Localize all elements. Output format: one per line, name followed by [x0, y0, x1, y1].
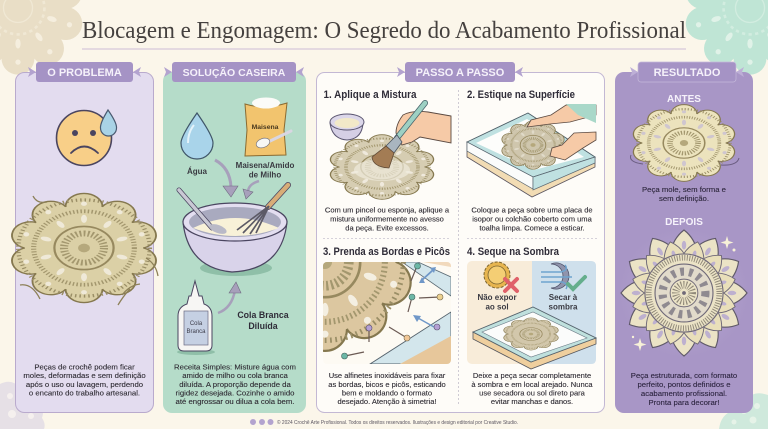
icon: cornstarch bag	[245, 98, 291, 156]
text: step 3: Use alfinetes inoxidáveis para fixar	[329, 371, 446, 380]
ribbon: solução caseira	[164, 62, 304, 82]
text: recipe: até engrossar ou dilua a cola bem.	[176, 397, 294, 406]
text: step 2: toalha limpa. Comece a esticar.	[479, 223, 585, 232]
text: step 2: Coloque a peça sobre uma placa de	[471, 206, 593, 215]
illustration: board with doily and hands	[467, 104, 596, 197]
arrow: glue to bowl	[218, 282, 241, 313]
step 4	[467, 246, 596, 406]
heading: step 4: 4. Seque na Sombra	[467, 246, 560, 258]
icon: cornstarch bag: Maisena	[252, 124, 279, 131]
ribbon: solução caseira: SOLUÇÃO CASEIRA	[183, 66, 286, 79]
text: recipe: rigidez desejada. Cozinhe o amido	[176, 388, 294, 397]
text: step 4: à sombra e em local arejado. Nunca	[471, 380, 593, 389]
illustration: doily with mixture	[327, 135, 437, 199]
label: maisena/amido de milho: Maisena/Amido	[236, 161, 294, 170]
spoon	[179, 190, 228, 236]
text: problem description: Peças de crochê podem ficar	[34, 362, 135, 372]
panel: solução caseira	[163, 62, 306, 413]
step 3	[323, 247, 451, 406]
heading: step 3: 3. Prenda as Bordas e Picôs	[323, 246, 450, 258]
text: step 3	[328, 371, 446, 406]
text: before: sem definição.	[659, 194, 709, 203]
text: before: Peça mole, sem forma e	[642, 185, 726, 194]
text: problem description	[23, 362, 146, 398]
text: after	[631, 371, 737, 407]
title: Blocagem e Engomagem: O Segredo do Acabamento Profissional	[82, 18, 686, 44]
label: secar à sombra: sombra	[549, 302, 578, 312]
ribbon: o problema	[28, 62, 141, 82]
text: problem description: o encanto do trabalho artesanal.	[29, 388, 140, 398]
icon: water drop	[181, 113, 213, 159]
label: não expor ao sol	[477, 293, 517, 312]
text: step 1: Com um pincel ou esponja, aplique a	[325, 206, 450, 215]
icon: wind, moon and check	[541, 263, 585, 289]
illustration: glue bottle	[177, 281, 215, 355]
text: step 2	[471, 206, 593, 232]
label: antes: ANTES	[667, 94, 701, 105]
label: maisena/amido de milho: de Milho	[249, 170, 281, 180]
heading: step 1: 1. Aplique a Mistura	[324, 89, 417, 101]
ribbon: passo a passo	[397, 62, 523, 82]
label: secar à sombra: Secar à	[549, 293, 578, 302]
text: before	[642, 185, 726, 203]
text: step 4: evitar manchas e danos.	[491, 397, 573, 406]
text: step 4	[471, 371, 593, 406]
panel: resultado	[614, 62, 754, 413]
heading: step 2: 2. Estique na Superfície	[467, 89, 575, 101]
decoration: bottom-left lavender doily	[0, 382, 45, 429]
label: água: Água	[187, 167, 208, 176]
text: after: Pronta para decorar!	[648, 398, 720, 407]
illustration: small bowl	[330, 114, 364, 140]
panel: o problema	[7, 62, 161, 412]
decoration: bottom-right mint doily	[719, 393, 768, 429]
panel: passo a passo	[316, 62, 605, 413]
ribbon: resultado	[630, 62, 744, 82]
text: recipe: amido de milho ou cola branca	[182, 371, 288, 380]
text: step 3: as bordas, bicos e picôs, esticando	[328, 380, 446, 389]
label: cola branca diluída: Cola Branca	[237, 310, 289, 320]
text: step 4: use secadora ou sol direto para	[479, 389, 586, 398]
illustration: mixing bowl	[179, 185, 288, 276]
label: secar à sombra	[549, 293, 578, 312]
arrow: water to bowl	[215, 160, 238, 197]
illustration: glue bottle: Branca	[186, 329, 206, 335]
illustration: deformed doily	[7, 193, 161, 305]
text: recipe: diluída. A proporção depende da	[179, 380, 291, 389]
text: step 1	[325, 206, 450, 232]
text: after: Peça estruturada, com formato	[631, 371, 737, 380]
illustration: pinned doily edge	[323, 262, 451, 364]
text: step 2: isopor ou colchão coberto com uma	[472, 215, 593, 224]
illustration: after doily	[614, 223, 754, 363]
text: recipe: Receita Simples: Misture água com	[174, 362, 296, 372]
footer: © 2024 Crochê Arte Profissional. Todos os direitos reservados. Ilustrações e design editorial por Creative Studio.	[277, 419, 518, 426]
decoration: top-right mint doily	[686, 0, 768, 74]
pins	[342, 263, 443, 359]
ribbon: passo a passo: PASSO A PASSO	[416, 67, 505, 79]
step 2	[467, 89, 596, 232]
whisk	[237, 185, 288, 234]
arrow: starch to bowl	[243, 181, 259, 199]
icon: sparkles	[632, 236, 736, 351]
ribbon: o problema: O PROBLEMA	[47, 67, 122, 79]
step 1	[324, 89, 451, 232]
icon: sun with cross	[484, 262, 517, 291]
text: problem description: após o uso ou lavagem, perdendo	[26, 380, 143, 389]
label: não expor ao sol: ao sol	[485, 302, 509, 312]
label: depois: DEPOIS	[665, 217, 703, 228]
text: after: perfeito, pontos definidos e	[637, 380, 731, 389]
decoration: top-left beige doily	[0, 0, 82, 74]
text: step 1: mistura uniformemente no avesso	[330, 215, 444, 224]
text: problem description: moles, deformadas e sem definição	[23, 371, 146, 380]
illustration: before doily	[630, 105, 739, 181]
text: step 3: bem e moldando o formato	[342, 389, 432, 398]
illustration: hand and brush	[372, 103, 451, 168]
label: cola branca diluída	[237, 310, 289, 331]
label: cola branca diluída: Diluída	[248, 321, 278, 331]
text: step 3: desejado. Atenção à simetria!	[337, 397, 437, 406]
label: não expor ao sol: Não expor	[477, 293, 517, 302]
text: after: acabamento profissional.	[641, 389, 727, 398]
text: step 4: Deixe a peça secar completamente	[473, 371, 591, 380]
text: step 1: da peça. Evite excessos.	[345, 223, 429, 232]
illustration: board with doily	[473, 307, 596, 369]
text: recipe	[174, 362, 296, 406]
label: maisena/amido de milho	[236, 161, 294, 180]
illustration: glue bottle: Cola	[190, 321, 203, 327]
illustration: drying in the shade	[467, 261, 596, 369]
ribbon: resultado: RESULTADO	[654, 67, 721, 79]
icon: sad face with sweat drop	[56, 110, 117, 166]
